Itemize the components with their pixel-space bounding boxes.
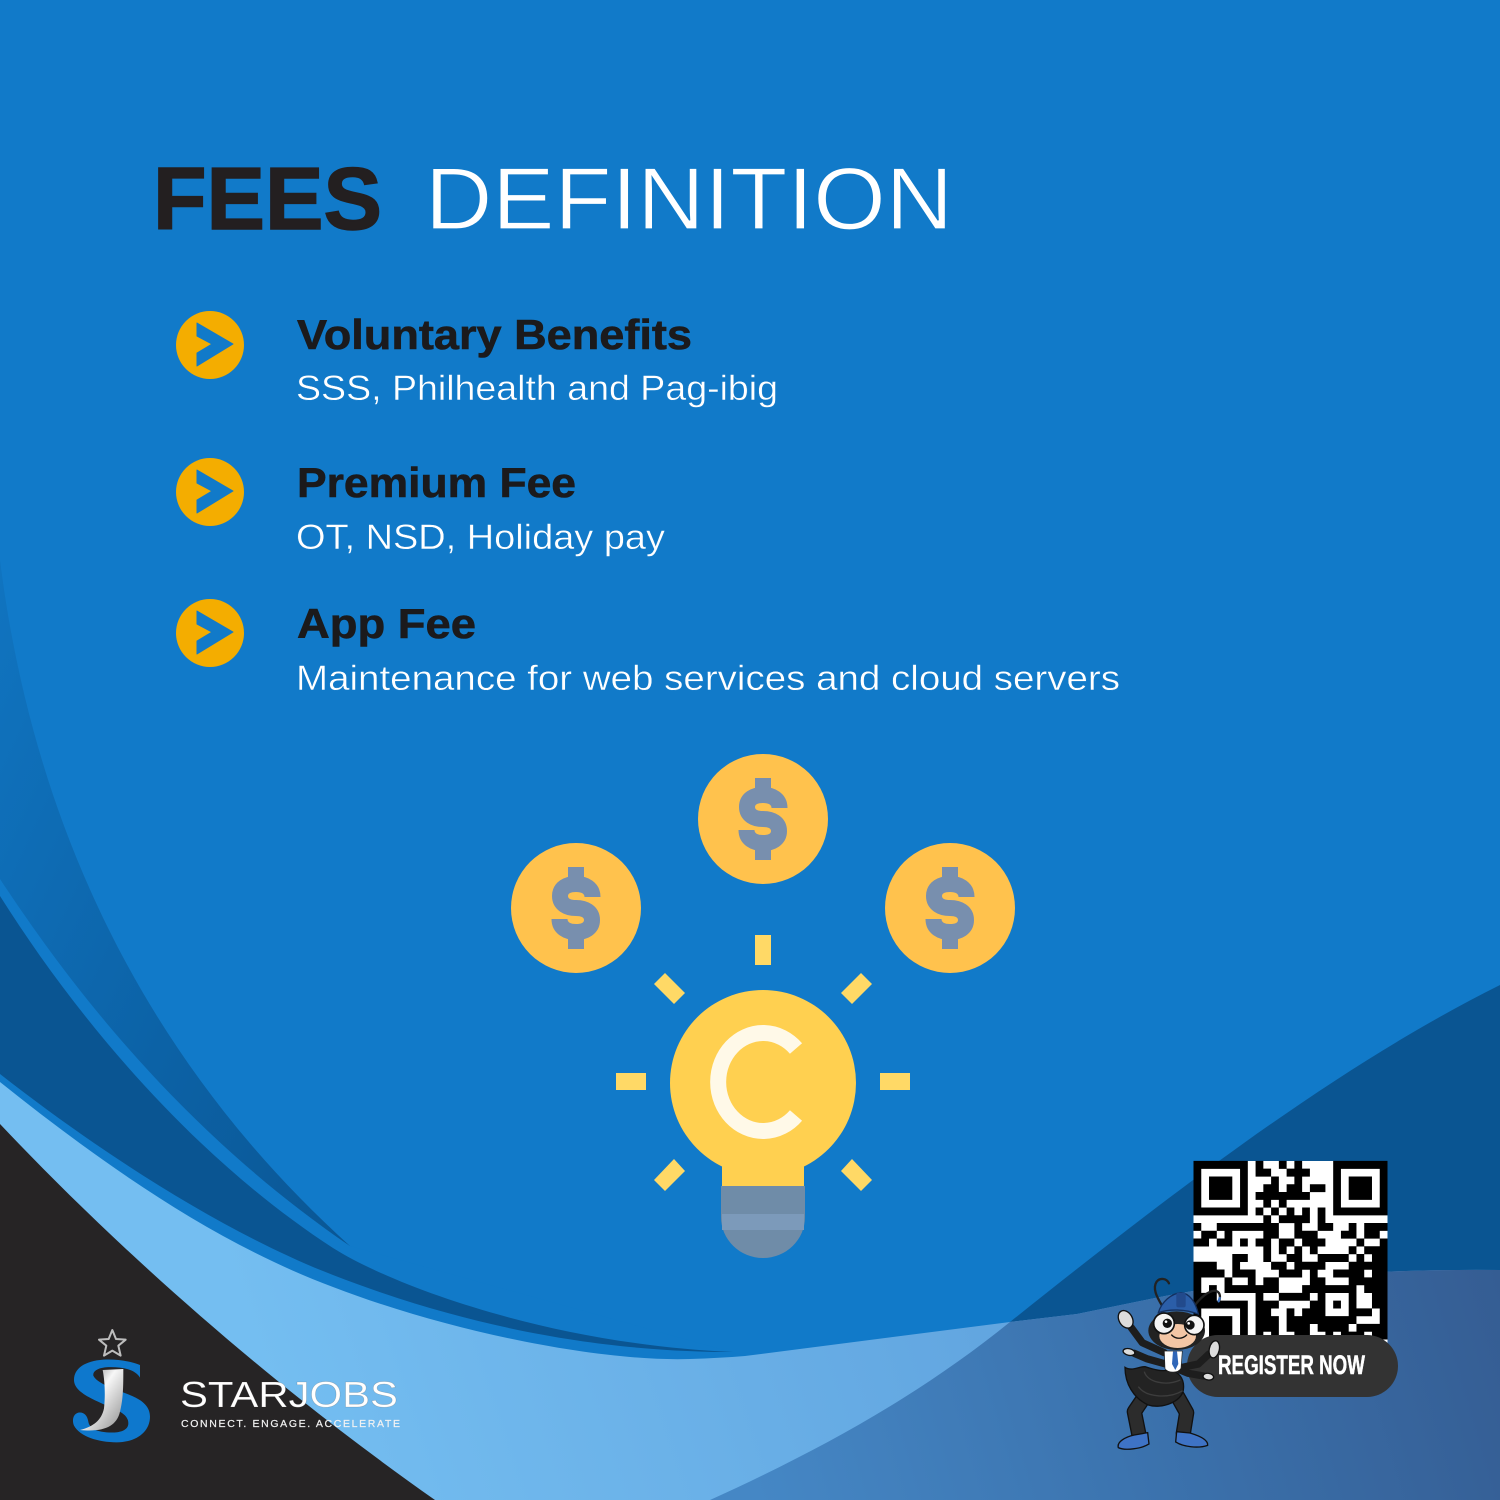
icon: coin top — [698, 754, 828, 884]
item heading: Premium Fee — [297, 459, 576, 506]
icon: coin left — [511, 843, 641, 973]
icon: arrow bullet — [176, 599, 244, 667]
icon: coin right — [885, 843, 1015, 973]
illustration: light bulb with coins — [511, 754, 1015, 1258]
title — [153, 149, 953, 248]
shirt and tie — [1164, 1351, 1182, 1372]
shoes — [1118, 1432, 1208, 1449]
item text: SSS, Philhealth and Pag-ibig — [296, 369, 778, 408]
icon: arrow bullet — [176, 458, 244, 526]
background waves — [0, 560, 1500, 1500]
QR code — [1194, 1161, 1388, 1343]
legs — [1134, 1395, 1187, 1435]
mascot: ant in suit — [1115, 1279, 1221, 1449]
title: FEES — [153, 149, 382, 248]
arms — [1131, 1327, 1209, 1376]
logo: Starjobs — [73, 1330, 400, 1442]
title: DEFINITION — [425, 149, 953, 248]
register now button — [1187, 1335, 1398, 1397]
item text: Maintenance for web services and cloud servers — [296, 659, 1120, 698]
icon: light rays — [616, 935, 910, 1191]
item text: OT, NSD, Holiday pay — [296, 518, 666, 557]
icon: light bulb — [670, 990, 856, 1258]
abdomen — [1125, 1367, 1184, 1406]
item heading: App Fee — [297, 600, 476, 647]
helmet — [1158, 1293, 1198, 1314]
item heading: Voluntary Benefits — [297, 311, 692, 358]
head — [1148, 1311, 1205, 1350]
icon: arrow bullet — [176, 311, 244, 379]
list item: App Fee — [176, 599, 1120, 698]
register now button: REGISTER NOW — [1218, 1350, 1365, 1380]
list item: Voluntary Benefits — [176, 311, 778, 408]
tagline: CONNECT. ENGAGE. ACCELERATE — [181, 1418, 400, 1430]
hands — [1115, 1308, 1221, 1381]
antennae — [1155, 1279, 1220, 1306]
list item: Premium Fee — [176, 458, 666, 557]
brand name: STARJOBS — [180, 1374, 398, 1415]
logo mark — [73, 1330, 150, 1442]
